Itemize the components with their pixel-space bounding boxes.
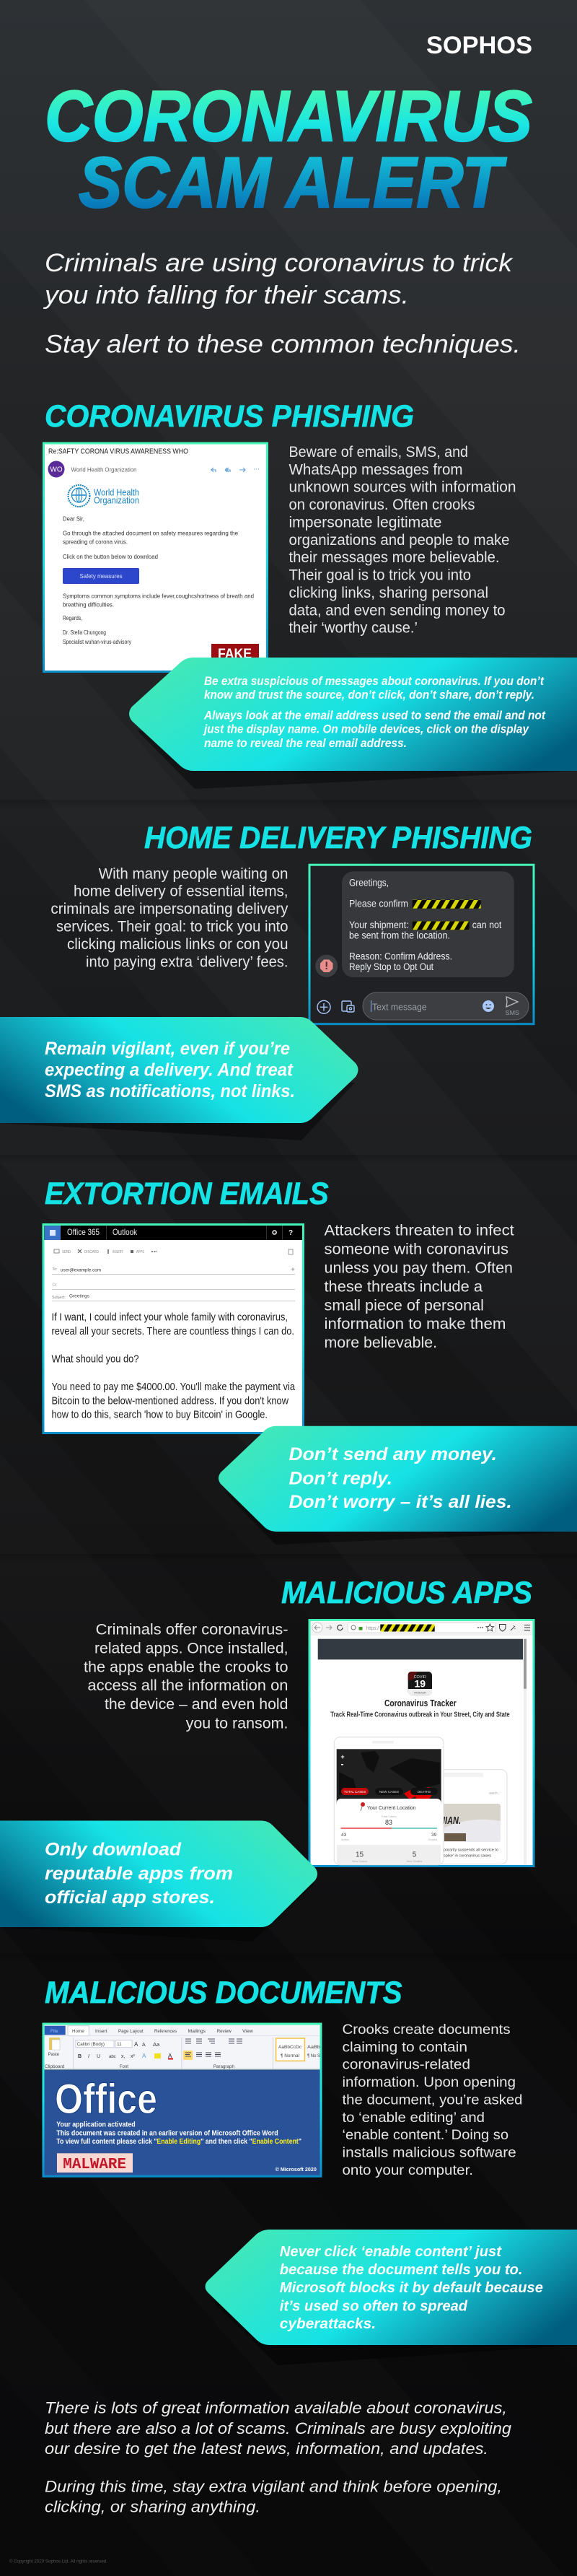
body text: malicious documents: Crooks create documents — [342, 2022, 511, 2038]
body text: extortion emails: unless you pay them. Often — [325, 1260, 513, 1277]
phone mockup: map: 15 — [356, 1851, 364, 1859]
stamp: malware — [57, 2153, 133, 2173]
compose toolbar: APPS — [136, 1250, 144, 1254]
screenshot: WHO phishing email: Dear Sir, — [63, 515, 84, 523]
intro text: Stay alert to these common techniques. — [45, 331, 521, 358]
heading: coronavirus phishing: CORONAVIRUS PHISHING — [45, 399, 414, 434]
screenshot: malicious word document: © Microsoft 2020 — [276, 2166, 317, 2173]
body text: coronavirus phishing — [288, 444, 516, 637]
word ribbon: A — [168, 2053, 172, 2059]
phone mockup: map: TOTAL CASES — [344, 1790, 366, 1794]
email body text: You need to pay me $4000.00. You'll make the payment via — [52, 1381, 296, 1393]
intro text: Criminals are using coronavirus to trick — [45, 249, 514, 277]
icon: WHO logo — [68, 485, 139, 507]
heading: malicious apps: MALICIOUS APPS — [281, 1576, 532, 1610]
phone mockup: map: 5 — [413, 1851, 417, 1859]
body text: malicious apps: the device – and even hold — [105, 1696, 288, 1713]
phone mockup: news — [433, 1770, 507, 1864]
word ribbon: Paragraph — [213, 2064, 234, 2069]
body text: extortion emails: Attackers threaten to infect — [325, 1222, 514, 1239]
heading: malicious documents: MALICIOUS DOCUMENTS — [45, 1975, 402, 2010]
word ribbon: Clipboard — [45, 2064, 65, 2069]
logo: Sophos: SOPHOS — [426, 32, 532, 59]
body text: extortion emails: someone with coronavirus — [325, 1241, 508, 1257]
document lure text: This document was created in an earlier version of Microsoft Office Word — [56, 2129, 278, 2137]
message bubble: Reason: Confirm Address. — [349, 951, 452, 961]
screenshot: extortion email — [43, 1224, 303, 1433]
body text: malicious apps — [84, 1621, 288, 1732]
screenshot: SMS message — [309, 865, 534, 1024]
body text: malicious documents: information. Upon opening — [342, 2074, 516, 2090]
stamp: fake — [211, 644, 259, 663]
word ribbon: Page Layout — [118, 2029, 144, 2034]
closing text: During this time, stay extra vigilant and think before opening, — [45, 2477, 502, 2496]
screenshot: WHO phishing email — [43, 443, 267, 671]
stamp: malware: MALWARE — [63, 2157, 126, 2173]
screenshot: WHO phishing email: World Health Organization — [71, 466, 137, 473]
callout: don't send money — [219, 1426, 577, 1545]
compose toolbar: SEND — [62, 1250, 71, 1254]
body text: malicious documents: coronavirus-related — [342, 2057, 470, 2073]
word ribbon: A — [134, 2041, 138, 2048]
callout: remain vigilant: expecting a delivery. And treat — [45, 1060, 294, 1080]
word ribbon: abc — [109, 2055, 116, 2059]
callout: never click enable content: Microsoft blocks it by default because — [280, 2279, 543, 2296]
heading: extortion emails: EXTORTION EMAILS — [45, 1176, 329, 1211]
callout: only download reputable apps — [0, 1820, 317, 1942]
title: SCAM ALERT — [79, 142, 507, 222]
screenshot: WHO phishing email: Regards, — [63, 615, 82, 621]
button: safety measures — [63, 568, 139, 584]
phone mockup: map: New Deaths — [407, 1859, 422, 1863]
word ribbon: AaBb — [307, 2045, 320, 2050]
email body text: If I want, I could infect your whole family with coronavirus, — [52, 1312, 288, 1324]
address fields: Subject: — [52, 1296, 66, 1300]
body text: malicious apps: the apps enable the crooks to — [84, 1659, 288, 1675]
screenshot: WHO phishing email: Re:SAFTY CORONA VIRUS AWARENESS WHO — [48, 447, 188, 456]
word ribbon: I — [88, 2054, 89, 2059]
phone mockup: map: + — [340, 1753, 345, 1760]
word ribbon: Mailings — [188, 2029, 206, 2034]
closing text: clicking, or sharing anything. — [45, 2498, 260, 2516]
icon: sender avatar: WO — [50, 466, 63, 473]
callout: be extra suspicious — [129, 658, 577, 789]
phone mockup: map: Total Cases — [382, 1815, 396, 1818]
icon: WHO logo: Organization — [94, 495, 139, 505]
body text: home delivery phishing: services. Their goal: to trick you into — [56, 919, 288, 935]
callout: be extra suspicious: just the display name. On mobile devices, click on the display — [203, 723, 529, 736]
outlook header bar: Outlook — [113, 1227, 138, 1237]
body text: coronavirus phishing: Beware of emails, SMS, and — [288, 444, 468, 460]
callout: remain vigilant: SMS as notifications, not links. — [45, 1081, 295, 1101]
phone mockup: news: IIAN. — [443, 1815, 461, 1827]
callout: be extra suspicious: know and trust the source, don’t click, don’t share, don’t reply. — [204, 689, 534, 702]
title — [45, 76, 532, 222]
office wordmark: Office — [55, 2076, 157, 2123]
phone mockup: map: 83 — [385, 1819, 392, 1826]
callout: be extra suspicious: name to reveal the real email address. — [204, 737, 407, 750]
body text: malicious documents: the document, you’re asked — [342, 2092, 522, 2108]
icon: covid tracker app: COVID — [414, 1675, 426, 1680]
message input: SMS — [506, 1009, 519, 1016]
address fields: Cc: — [52, 1283, 58, 1287]
stamp: fake: FAKE — [218, 647, 252, 662]
browser toolbar: https:// — [366, 1626, 380, 1631]
icon: alert — [315, 955, 338, 977]
message input: Text message — [372, 1001, 427, 1012]
message input — [363, 992, 529, 1020]
callout: never click enable content: because the document tells you to. — [280, 2261, 522, 2278]
outlook header bar — [45, 1226, 302, 1240]
icon: sender avatar — [48, 460, 65, 478]
icon: WHO logo: World Health — [94, 488, 139, 498]
callout: don't send money: Don’t worry – it’s all lies. — [288, 1492, 512, 1512]
phone mockup: map: NEW CASES — [379, 1790, 399, 1794]
body text: home delivery phishing: With many people waiting on — [99, 865, 288, 882]
body text: coronavirus phishing: on coronavirus. Often crooks — [288, 497, 475, 513]
body text: coronavirus phishing: unknown sources with information — [288, 479, 516, 496]
word ribbon: Home — [72, 2029, 84, 2034]
word ribbon: U — [97, 2054, 100, 2059]
screenshot: WHO phishing email: spreading of corona virus. — [63, 538, 128, 546]
body text: extortion emails: information to make them — [325, 1316, 506, 1332]
phone mockup: news: porarily suspends all service to — [444, 1848, 498, 1853]
screenshot: malicious word document — [43, 2024, 321, 2176]
word ribbon: x, — [121, 2054, 125, 2059]
email body text: how to do this, search 'how to buy Bitcoin' in Google. — [52, 1410, 268, 1421]
word ribbon: Aa — [153, 2041, 160, 2048]
body text: coronavirus phishing: their ‘worthy cause.’ — [288, 620, 418, 637]
callout: don't send money: Don’t send any money. — [288, 1444, 497, 1464]
phone mockup: map: 39 — [431, 1833, 437, 1838]
body text: coronavirus phishing: Their goal is to trick you into — [288, 567, 471, 584]
body text: malicious apps: access all the information on — [87, 1677, 288, 1694]
word ribbon: Insert — [95, 2029, 107, 2034]
document lure text: Your application activated — [56, 2121, 136, 2129]
phone mockup: news: search... — [489, 1791, 500, 1796]
callout: remain vigilant: Remain vigilant, even if you’re — [45, 1039, 290, 1059]
word ribbon: References — [154, 2029, 177, 2034]
word ribbon: AaBbCcDc — [278, 2045, 302, 2050]
word ribbon: Font — [120, 2064, 128, 2069]
screenshot: WHO phishing email: Specialist wuhan-virus-advisory — [63, 639, 132, 645]
scrollbar — [524, 1639, 527, 1865]
email body text: Bitcoin to the below-mentioned address. If you don't know — [52, 1395, 288, 1407]
word ribbon: 11 — [117, 2042, 122, 2047]
message bubble: Greetings, — [349, 877, 389, 888]
address fields: user@example.com — [61, 1267, 101, 1272]
body text: extortion emails: more believable. — [325, 1335, 437, 1351]
email body text: reveal all your secrets. There are countless things I can do. — [52, 1326, 294, 1337]
word ribbon: Calibri (Body) — [77, 2042, 105, 2047]
document lure text: To view full content please click "Enable Editing" and then click "Enable Content" — [56, 2137, 301, 2146]
body text: extortion emails — [325, 1222, 514, 1351]
phone mockup: map: New Cases — [352, 1859, 367, 1863]
screenshot: coronavirus tracker site — [309, 1620, 534, 1866]
screenshot: coronavirus tracker site: Coronavirus Tracker — [384, 1698, 457, 1708]
icon: covid tracker app — [408, 1672, 432, 1695]
address fields: To: — [52, 1267, 58, 1272]
button: safety measures: Safety measures — [79, 573, 123, 580]
body text: home delivery phishing: criminals are impersonating delivery — [50, 901, 288, 917]
message bubble: Please confirm — [349, 899, 408, 909]
callout: never click enable content: Never click ‘enable content’ just — [280, 2243, 502, 2260]
body text: home delivery phishing: into paying extra ‘delivery’ fees. — [86, 953, 288, 970]
heading: home delivery phishing: HOME DELIVERY PHISHING — [144, 821, 532, 855]
phone mockup: map — [334, 1737, 444, 1865]
body text: malicious documents — [342, 2022, 522, 2178]
screenshot: WHO phishing email: Go through the attached document on safety measures regarding the — [63, 530, 238, 537]
screenshot: WHO phishing email: breathing difficulties. — [63, 602, 114, 608]
word ribbon — [45, 2025, 321, 2070]
body text: malicious documents: claiming to contain — [342, 2039, 467, 2055]
callout: never click enable content: cyberattacks. — [280, 2315, 376, 2332]
closing text: but there are also a lot of scams. Criminals are busy exploiting — [45, 2419, 512, 2437]
word ribbon: View — [242, 2029, 253, 2034]
message bubble: Reply Stop to Opt Out — [349, 961, 433, 972]
icon: covid tracker app: TRACKER — [414, 1692, 426, 1695]
copyright: © Copyright 2020 Sophos Ltd. All rights reserved. — [9, 2558, 107, 2564]
screenshot: WHO phishing email: Click on the button below to download — [63, 554, 158, 560]
screenshot: coronavirus tracker site: Track Real-Time Coronavirus outbreak in Your Street, City and State — [330, 1711, 510, 1719]
word ribbon: Review — [217, 2029, 232, 2034]
word ribbon: Paste — [48, 2052, 59, 2057]
icon: covid tracker app: 19 — [415, 1677, 426, 1689]
outlook header bar: Office 365 — [67, 1227, 100, 1237]
callout: only download reputable apps: Only download — [45, 1840, 182, 1860]
body text: malicious documents: to ‘enable editing’ and — [342, 2110, 485, 2126]
screenshot: WHO phishing email: Dr. Stella Chungong — [63, 629, 106, 636]
callout: be extra suspicious: Be extra suspicious of messages about coronavirus. If you don’t — [204, 675, 545, 688]
callout: don't send money: Don’t reply. — [288, 1468, 392, 1488]
body text: extortion emails: these threats include a — [325, 1278, 483, 1295]
phone mockup: map: Your Current Location — [367, 1804, 415, 1811]
body text: coronavirus phishing: organizations and people to make — [288, 532, 509, 549]
phone mockup: map: DEATHS — [418, 1790, 431, 1794]
body text: home delivery phishing — [50, 865, 288, 970]
browser toolbar — [310, 1621, 532, 1636]
closing text: There is lots of great information available about coronavirus, — [45, 2399, 507, 2417]
closing text: our desire to get the latest news, information, and updates. — [45, 2440, 488, 2458]
callout: be extra suspicious: Always look at the email address used to send the email and not — [203, 709, 546, 722]
compose toolbar — [54, 1249, 293, 1254]
body text: coronavirus phishing: clicking links, sharing personal — [288, 585, 488, 601]
phone mockup: news: spike' in coronavirus cases — [444, 1854, 492, 1858]
word ribbon: x² — [131, 2054, 136, 2059]
intro text — [43, 249, 521, 358]
message bubble: be sent from the location. — [349, 930, 450, 941]
compose toolbar: INSERT — [113, 1250, 123, 1254]
callout: only download reputable apps: official app stores. — [45, 1887, 215, 1908]
callout: never click enable content: it’s used so often to spread — [280, 2297, 467, 2314]
word ribbon: ¶ No S — [307, 2053, 321, 2058]
body text: malicious documents: installs malicious software — [342, 2145, 516, 2161]
message bubble: Your shipment: — [349, 920, 409, 930]
message bubble — [342, 871, 514, 977]
word ribbon: ¶ Normal — [281, 2053, 300, 2058]
email body text — [52, 1312, 296, 1421]
body text: malicious apps: related apps. Once installed, — [94, 1640, 288, 1656]
closing text — [45, 2399, 512, 2516]
address fields: + — [291, 1266, 295, 1274]
word ribbon: B — [78, 2054, 82, 2059]
icon: add — [317, 1000, 330, 1013]
body text: malicious apps: you to ransom. — [186, 1715, 288, 1732]
callout: only download reputable apps: reputable apps from — [45, 1864, 233, 1884]
icon: gallery — [342, 1001, 354, 1012]
body text: malicious documents: ‘enable content.’ Doing so — [342, 2127, 508, 2143]
document lure text — [56, 2121, 301, 2146]
message bubble: can not — [472, 920, 502, 930]
screenshot: WHO phishing email: Symptoms common symptoms include fever,coughcshortness of breath and — [63, 593, 254, 599]
address fields — [52, 1266, 295, 1301]
phone mockup: map: Closed — [428, 1838, 437, 1841]
body text: coronavirus phishing: WhatsApp messages from — [288, 461, 463, 478]
address fields: Greetings — [69, 1295, 89, 1299]
word ribbon: A — [142, 2043, 146, 2048]
dark banner — [318, 1639, 523, 1659]
title: CORONAVIRUS — [45, 76, 532, 156]
phone mockup: map: 43 — [341, 1833, 347, 1838]
body text: malicious apps: Criminals offer coronavirus- — [96, 1621, 288, 1638]
body text: coronavirus phishing: impersonate legitimate — [288, 514, 441, 531]
body text: extortion emails: small piece of personal — [325, 1297, 484, 1314]
compose toolbar: DISCARD — [84, 1250, 99, 1254]
body text: coronavirus phishing: their messages more believable. — [288, 549, 499, 566]
body text: home delivery phishing: clicking malicious links or con you — [67, 936, 288, 953]
body text: coronavirus phishing: data, and even sending money to — [288, 602, 505, 619]
email body text: What should you do? — [52, 1354, 138, 1366]
body text: home delivery phishing: home delivery of essential items, — [74, 883, 288, 900]
intro text: you into falling for their scams. — [43, 281, 409, 309]
callout: never click enable content — [205, 2230, 577, 2365]
callout: remain vigilant — [0, 1017, 358, 1140]
outlook header bar: ? — [288, 1229, 293, 1237]
icons: reply and forward — [211, 468, 259, 472]
word ribbon: File — [50, 2029, 58, 2034]
body text: malicious documents: onto your computer. — [342, 2162, 473, 2178]
word ribbon: A — [142, 2053, 146, 2059]
phone mockup: map: Active — [341, 1838, 350, 1841]
